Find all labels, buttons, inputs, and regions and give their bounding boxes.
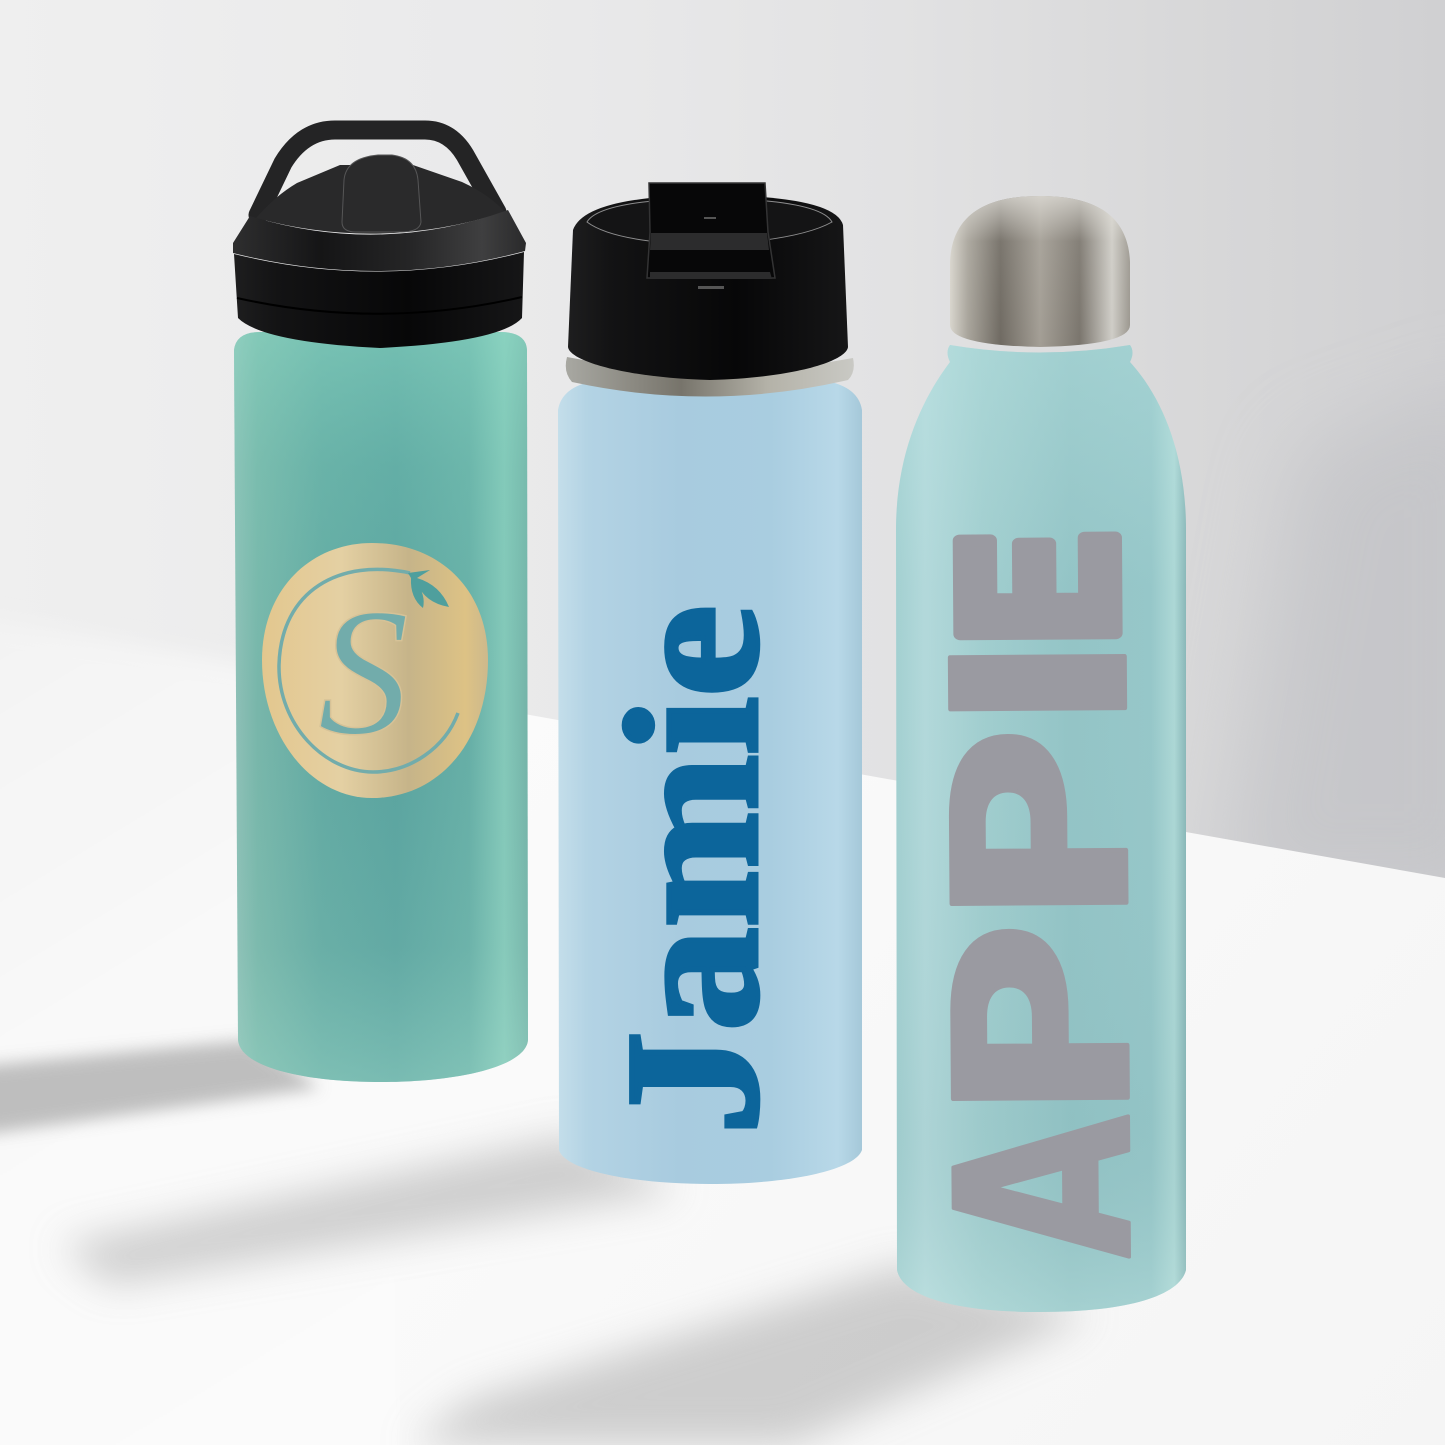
personalised name: P: [902, 724, 1184, 930]
shadow: right bottle: [410, 1265, 1090, 1445]
personalised name: A: [905, 1115, 1186, 1260]
logo ring: [279, 569, 458, 772]
blue bottle body: [558, 380, 862, 1184]
lid lower bands: [234, 252, 524, 348]
personalised name: P: [904, 919, 1185, 1125]
teal bottle body: [234, 332, 528, 1082]
lid top dome: [256, 165, 505, 234]
steel cap: [950, 196, 1130, 347]
aqua bottle body: [896, 345, 1186, 1312]
lid collar: [233, 210, 526, 271]
bottle: light blue "Jamie": [558, 183, 862, 1184]
tab highlights: [650, 233, 772, 279]
logo letter S: S: [318, 572, 409, 773]
personalised name: I: [902, 631, 1182, 735]
personalised name: Jamie: [588, 605, 798, 1135]
shadows on the table: [0, 1040, 1090, 1445]
personalised name: E: [918, 524, 1167, 651]
lid spout: [342, 155, 421, 232]
bottle: aqua "APPIE": [896, 196, 1186, 1312]
logo leaves: [408, 570, 449, 608]
black lid: [568, 195, 848, 380]
gold logo disc: [262, 543, 488, 798]
background: wall: [0, 0, 1445, 900]
shadow: middle bottle: [60, 1135, 680, 1285]
bottle: teal with logo: [233, 130, 528, 1082]
shadow: left bottle: [0, 1040, 320, 1135]
lid flip tab: [647, 183, 775, 278]
icon: lid handle: [258, 130, 497, 215]
background: table surface: [0, 610, 1445, 1445]
lid inner recess: [587, 198, 832, 245]
steel neck ring: [566, 357, 854, 397]
lid dots: [698, 217, 724, 289]
